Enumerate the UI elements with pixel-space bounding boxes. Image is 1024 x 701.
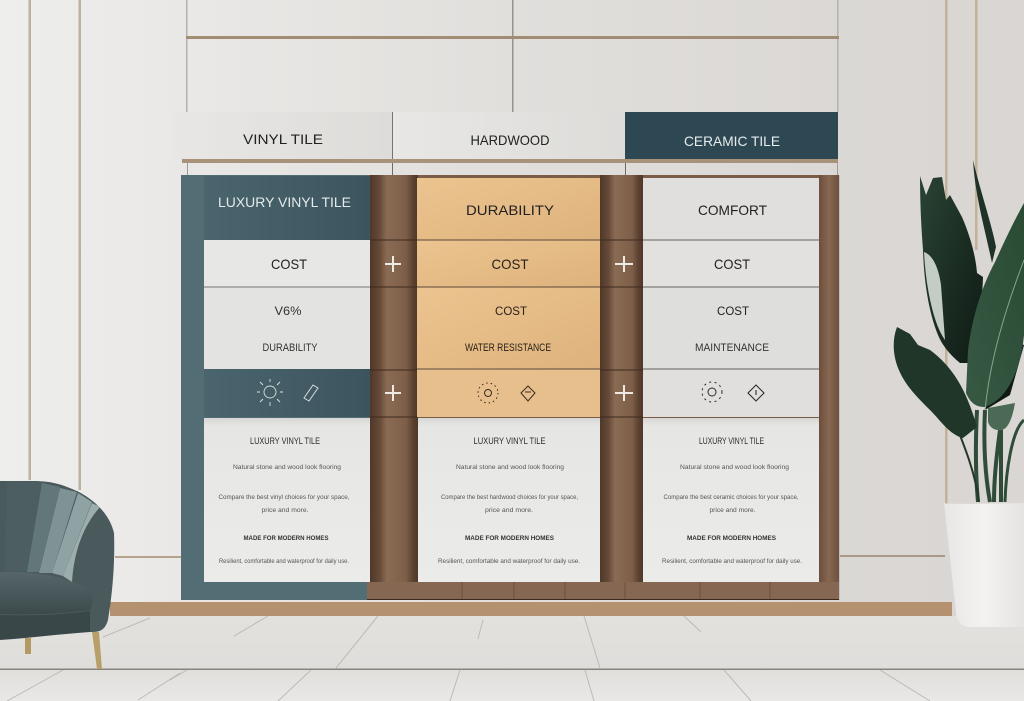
plant [894, 160, 1024, 627]
column 2 rows [417, 240, 600, 287]
column 3 description card: price and more. [710, 507, 756, 514]
header: ceramic tile cell [625, 112, 838, 160]
header: vinyl tile: VINYL TILE [243, 131, 323, 147]
sofa seat cushion [0, 572, 93, 614]
sofa base [0, 611, 90, 640]
column 1 detail row [204, 288, 370, 369]
column 3 description card: MADE FOR MODERN HOMES [687, 535, 777, 542]
column 2 description card: MADE FOR MODERN HOMES [465, 535, 555, 542]
column 2 description card: Natural stone and wood look flooring [456, 464, 564, 471]
column 1 description card: price and more. [262, 507, 309, 514]
column 1: luxury vinyl tile [204, 176, 370, 582]
icon: sun [257, 379, 283, 406]
column 1 description card: Natural stone and wood look flooring [233, 464, 341, 471]
big right leaf [966, 203, 1024, 407]
column 1: luxury vinyl tile: DURABILITY [262, 342, 318, 354]
thin back leaf [973, 160, 996, 263]
column 1 cost row [204, 240, 370, 287]
column 1 heading [204, 176, 370, 240]
column 1: luxury vinyl tile: LUXURY VINYL TILE [218, 194, 351, 210]
upper left leaf [920, 176, 983, 363]
header: ceramic tile: CERAMIC TILE [684, 133, 780, 149]
column 1 icon row [204, 369, 370, 417]
teal backing [181, 175, 367, 600]
big leaf rib [985, 260, 1024, 410]
column 1 description card: Compare the best vinyl choices for your space, [218, 494, 350, 501]
sofa channel stripes [5, 482, 100, 582]
column 3: ceramic tile: MAINTENANCE [695, 342, 769, 354]
lower dark leaf [985, 340, 1024, 410]
column 2 heading [417, 178, 600, 240]
icon: diamond tag [748, 385, 764, 401]
column 3: ceramic tile [643, 178, 819, 582]
column 3 description card: Resilient, comfortable and waterproof for daily use. [662, 558, 802, 565]
column 3: ceramic tile: COST [714, 256, 750, 272]
pot [944, 503, 1024, 627]
sofa [0, 481, 114, 669]
sofa back [0, 481, 114, 632]
floor [0, 616, 1024, 701]
left leaf [894, 327, 977, 438]
column 2: hardwood: COST [495, 304, 528, 318]
column 3: ceramic tile: COMFORT [698, 202, 767, 218]
icon: tag [304, 385, 318, 401]
sofa back legs and front leg [25, 638, 31, 654]
column 2 description card [418, 418, 600, 582]
plus signs [385, 256, 633, 401]
column 2 description card: price and more. [485, 507, 533, 514]
column 3 rows [643, 240, 819, 287]
wood backing [367, 175, 839, 600]
small back leaf [988, 403, 1015, 430]
column 1: luxury vinyl tile: COST [271, 256, 307, 272]
column 2 description card: LUXURY VINYL TILE [474, 436, 546, 446]
baseboard [110, 602, 952, 616]
column 3: ceramic tile: COST [717, 304, 750, 318]
column 3 heading [643, 178, 819, 240]
header: hardwood: HARDWOOD [470, 132, 550, 148]
column 2 description card: Resilient, comfortable and waterproof for daily use. [438, 558, 580, 565]
column 3 description card [643, 418, 819, 582]
column 1 description card: MADE FOR MODERN HOMES [244, 535, 329, 542]
column 2 description card: Compare the best hardwood choices for your space, [441, 494, 578, 501]
plant stems [948, 405, 1024, 502]
header bar [172, 112, 838, 163]
column 1 description card [204, 418, 370, 582]
column 3 description card: Compare the best ceramic choices for your space, [664, 494, 799, 501]
column 2: hardwood: WATER RESISTANCE [465, 342, 551, 354]
column 3 description card: Natural stone and wood look flooring [680, 464, 789, 471]
column 1: luxury vinyl tile: V6% [274, 304, 302, 318]
column 2: hardwood: DURABILITY [466, 202, 555, 218]
column 3 description card: LUXURY VINYL TILE [699, 436, 764, 446]
comparison board [181, 175, 839, 600]
icon: diamond [521, 386, 535, 401]
column 1 description card: Resilient, comfortable and waterproof for daily use. [219, 558, 349, 565]
highlight on upper left leaf [924, 252, 945, 340]
icon: dotted sun [478, 383, 498, 403]
icon: burst [702, 382, 722, 402]
column 1 description card: LUXURY VINYL TILE [250, 436, 320, 446]
column 2: hardwood: COST [492, 256, 529, 272]
column 2: hardwood [417, 178, 600, 582]
